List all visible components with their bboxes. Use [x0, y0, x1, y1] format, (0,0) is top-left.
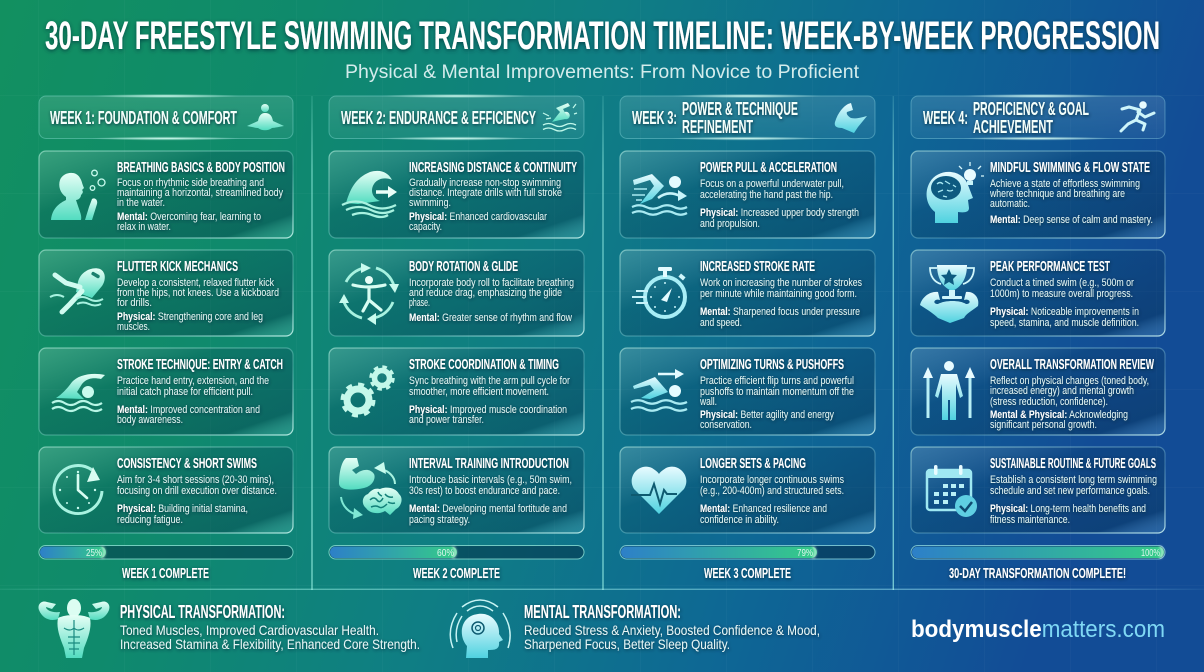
- description: distance. Integrate drills with full stroke: [409, 187, 562, 199]
- description: increased energy) and mental growth: [990, 385, 1134, 397]
- icon: rotation figure: [339, 263, 399, 325]
- icon: swimmer: [52, 374, 105, 411]
- description: Incorporate longer continuous swims: [700, 474, 844, 486]
- description: Practice efficient flip turns and powerful: [700, 375, 854, 387]
- progress bar: week 2: 60%: [437, 547, 454, 559]
- heading: BODY ROTATION & GLIDE: [409, 258, 518, 275]
- description: [117, 375, 269, 426]
- description: Focus on a powerful underwater pull,: [700, 178, 844, 190]
- description: Reflect on physical changes (toned body,: [990, 375, 1149, 387]
- description: significant personal growth.: [990, 419, 1097, 431]
- description: Increased Stamina & Flexibility, Enhanced Core Strength.: [120, 636, 420, 652]
- description: Achieve a state of effortless swimming: [990, 178, 1140, 190]
- icon: breathing head: [51, 170, 105, 220]
- heading: PEAK PERFORMANCE TEST: [990, 258, 1110, 275]
- heading: BREATHING BASICS & BODY POSITION: [117, 159, 285, 176]
- description: Mental: Sharpened focus under pressure: [700, 306, 860, 318]
- card: power pull: [620, 151, 875, 238]
- progress bar: week 2: [329, 546, 584, 559]
- label: week 3 complete: WEEK 3 COMPLETE: [704, 565, 791, 582]
- description: relax in water.: [117, 221, 171, 233]
- icon: swimmer turning: [631, 369, 687, 411]
- description: Introduce basic intervals (e.g., 50m swim,: [409, 474, 572, 486]
- description: wall.: [699, 396, 717, 408]
- description: muscles.: [117, 321, 150, 333]
- description: [409, 474, 572, 526]
- label: week 1 complete: WEEK 1 COMPLETE: [122, 565, 209, 582]
- description: Practice hand entry, extension, and the: [117, 375, 269, 387]
- week 3 header: POWER & TECHNIQUE: [682, 98, 798, 119]
- description: body awareness.: [117, 414, 183, 426]
- description: capacity.: [409, 221, 442, 233]
- description: Focus on rhythmic side breathing and: [117, 177, 264, 189]
- icon: person with up arrows: [923, 361, 975, 420]
- icon: trophy and muscles: [920, 265, 978, 323]
- week 4 header: WEEK 4:: [923, 107, 968, 128]
- icon: swimmer splash: [543, 103, 577, 131]
- description: Physical: Increased upper body strength: [700, 207, 859, 219]
- progress bar: week 4: 100%: [1141, 547, 1160, 559]
- description: swimming.: [409, 197, 451, 209]
- icon: gears: [342, 367, 393, 416]
- week 2 header: WEEK 2: ENDURANCE & EFFICIENCY: [341, 107, 536, 128]
- description: pacing strategy.: [409, 514, 470, 526]
- website url: bodymusclematters.com: [911, 616, 1165, 643]
- card: breathing basics: [39, 151, 293, 238]
- description: [990, 375, 1149, 431]
- description: maintaining a horizontal, streamlined body: [117, 187, 283, 199]
- week 1 header: [39, 94, 293, 140]
- icon: calendar with check: [927, 465, 977, 517]
- card: longer sets: [620, 447, 875, 533]
- panel: week 1 column: [39, 94, 293, 582]
- card: body rotation: [329, 250, 584, 336]
- description: Mental: Deep sense of calm and mastery.: [990, 214, 1153, 226]
- description: [117, 177, 283, 233]
- icon: runner: [1121, 101, 1154, 131]
- description: conservation.: [700, 419, 752, 431]
- week 4 header: ACHIEVEMENT: [973, 116, 1053, 137]
- progress bar: week 1: 25%: [86, 547, 102, 559]
- description: Develop a consistent, relaxed flutter kick: [117, 277, 274, 289]
- description: Sharpened Focus, Better Sleep Quality.: [524, 636, 730, 652]
- card: stroke technique: [39, 348, 293, 435]
- description: [409, 277, 574, 324]
- heading: INTERVAL TRAINING INTRODUCTION: [409, 455, 569, 472]
- week 2 header: [329, 94, 584, 140]
- card: overall review: [911, 348, 1165, 435]
- card: turns and pushoffs: [620, 348, 875, 435]
- week 3 header: REFINEMENT: [682, 116, 753, 137]
- icon: stopwatch: [632, 267, 686, 317]
- progress bar: week 3: 79%: [797, 547, 813, 559]
- week 1 header: WEEK 1: FOUNDATION & COMFORT: [50, 107, 237, 128]
- description: [117, 474, 277, 526]
- subtitle: Physical & Mental Improvements: From Novice to Proficient: [345, 62, 860, 83]
- description: Mental: Improved concentration and: [117, 404, 260, 416]
- description: Work on increasing the number of strokes: [700, 277, 862, 289]
- progress bar: week 1: [39, 546, 293, 559]
- description: Physical: Strengthening core and leg: [117, 311, 263, 323]
- description: where technique and breathing are: [989, 188, 1125, 200]
- description: fitness maintenance.: [990, 514, 1070, 526]
- heading: INCREASED STROKE RATE: [700, 258, 815, 275]
- week 3 header: WEEK 3:: [632, 107, 677, 128]
- description: [120, 622, 420, 652]
- description: pushoffs to maintain momentum off the: [700, 386, 854, 398]
- progress bar: week 4: [911, 546, 1165, 559]
- card: flutter kick: [39, 250, 293, 336]
- description: Mental: Enhanced resilience and: [700, 503, 827, 515]
- icon: muscle and brain: [339, 458, 402, 519]
- description: accelerating the hand past the hip.: [700, 189, 833, 201]
- description: Establish a consistent long term swimming: [990, 474, 1157, 486]
- description: Sync breathing with the arm pull cycle for: [409, 375, 570, 387]
- icon: bicep: [835, 103, 867, 133]
- description: Conduct a timed swim (e.g., 500m or: [990, 277, 1134, 289]
- description: [524, 622, 820, 652]
- description: [700, 277, 862, 329]
- description: for drills.: [117, 297, 152, 309]
- heading: PHYSICAL TRANSFORMATION:: [120, 602, 285, 622]
- icon: brain head with bulb: [927, 162, 984, 223]
- description: focusing on drill execution over distance.: [117, 485, 277, 497]
- description: Physical: Better agility and energy: [700, 409, 834, 421]
- description: [117, 277, 279, 333]
- description: Reduced Stress & Anxiety, Boosted Confidence & Mood,: [524, 622, 820, 638]
- description: Gradually increase non-stop swimming: [409, 177, 561, 189]
- description: phase.: [409, 297, 430, 309]
- card: stroke coordination: [329, 348, 584, 435]
- icon: muscular torso: [39, 599, 109, 658]
- heading: MENTAL TRANSFORMATION:: [524, 602, 681, 622]
- description: Physical: Building initial stamina,: [117, 503, 248, 515]
- description: and propulsion.: [700, 218, 760, 230]
- week 3 header: [620, 94, 875, 140]
- description: per minute while maintaining good form.: [700, 288, 857, 300]
- description: Mental: Developing mental fortitude and: [409, 503, 567, 515]
- description: from the hips, not knees. Use a kickboard: [117, 287, 279, 299]
- description: Mental & Physical: Acknowledging: [990, 409, 1128, 421]
- description: Physical: Improved muscle coordination: [409, 404, 567, 416]
- description: [990, 474, 1157, 526]
- description: (e.g., 200-400m) and structured sets.: [700, 485, 844, 497]
- heading: CONSISTENCY & SHORT SWIMS: [117, 455, 257, 472]
- card: interval training: [329, 447, 584, 533]
- panel: week 4 column: [911, 94, 1165, 582]
- description: and speed.: [700, 317, 742, 329]
- icon: heart: [631, 467, 686, 514]
- description: [700, 178, 859, 230]
- description: [409, 177, 562, 233]
- description: confidence in ability.: [700, 514, 779, 526]
- panel: mental transformation: [450, 600, 820, 658]
- label: week 2 complete: WEEK 2 COMPLETE: [413, 565, 500, 582]
- description: schedule and set new performance goals.: [990, 485, 1150, 497]
- description: Physical: Long-term health benefits and: [990, 503, 1146, 515]
- card: increasing distance: [329, 151, 584, 238]
- heading: STROKE TECHNIQUE: ENTRY & CATCH: [117, 356, 283, 373]
- description: and reduce drag, emphasizing the glide: [409, 287, 562, 299]
- description: [990, 277, 1139, 329]
- heading: STROKE COORDINATION & TIMING: [409, 356, 559, 373]
- description: 1000m) to measure overall progress.: [990, 288, 1133, 300]
- heading: INCREASING DISTANCE & CONTINUITY: [409, 159, 577, 176]
- description: [989, 178, 1153, 226]
- card: sustainable routine: [911, 447, 1165, 533]
- description: [699, 375, 854, 431]
- icon: flutter kick: [50, 268, 105, 312]
- description: reducing fatigue.: [117, 514, 183, 526]
- icon: meditation: [247, 104, 284, 130]
- description: in the water.: [117, 197, 165, 209]
- heading: OPTIMIZING TURNS & PUSHOFFS: [700, 356, 844, 373]
- description: Aim for 3-4 short sessions (20-30 mins),: [117, 474, 274, 486]
- card: consistency: [39, 447, 293, 533]
- icon: wave with arrow: [342, 171, 397, 217]
- card: peak performance: [911, 250, 1165, 336]
- icon: clock: [54, 466, 102, 514]
- heading: POWER PULL & ACCELERATION: [700, 159, 837, 176]
- description: speed, stamina, and muscle definition.: [990, 317, 1139, 329]
- panel: week 2 column: [329, 94, 584, 582]
- description: Toned Muscles, Improved Cardiovascular Health.: [120, 622, 379, 638]
- description: Mental: Overcoming fear, learning to: [117, 211, 261, 223]
- week 4 header: PROFICIENCY & GOAL: [973, 98, 1089, 119]
- description: and power transfer.: [409, 414, 484, 426]
- icon: head with waves: [450, 600, 510, 658]
- card: mindful swimming: [911, 151, 1165, 238]
- panel: week 3 column: [620, 94, 875, 582]
- description: Mental: Greater sense of rhythm and flow: [409, 312, 572, 324]
- description: [700, 474, 844, 526]
- description: (stress reduction, confidence).: [990, 396, 1108, 408]
- description: 30s rest) to boost endurance and pace.: [409, 485, 560, 497]
- description: automatic.: [990, 198, 1030, 210]
- heading: FLUTTER KICK MECHANICS: [117, 258, 238, 275]
- panel: physical transformation: [39, 599, 420, 658]
- description: Incorporate body roll to facilitate breathing: [409, 277, 574, 289]
- week 4 header: [911, 94, 1165, 140]
- progress bar: week 3: [620, 546, 875, 559]
- description: smoother, more efficient movement.: [409, 386, 549, 398]
- description: initial catch phase for efficient pull.: [117, 386, 253, 398]
- icon: swimmer with arrow: [632, 174, 687, 215]
- description: Physical: Enhanced cardiovascular: [409, 211, 547, 223]
- heading: LONGER SETS & PACING: [700, 455, 806, 472]
- description: [409, 375, 570, 426]
- card: stroke rate: [620, 250, 875, 336]
- description: Physical: Noticeable improvements in: [990, 306, 1139, 318]
